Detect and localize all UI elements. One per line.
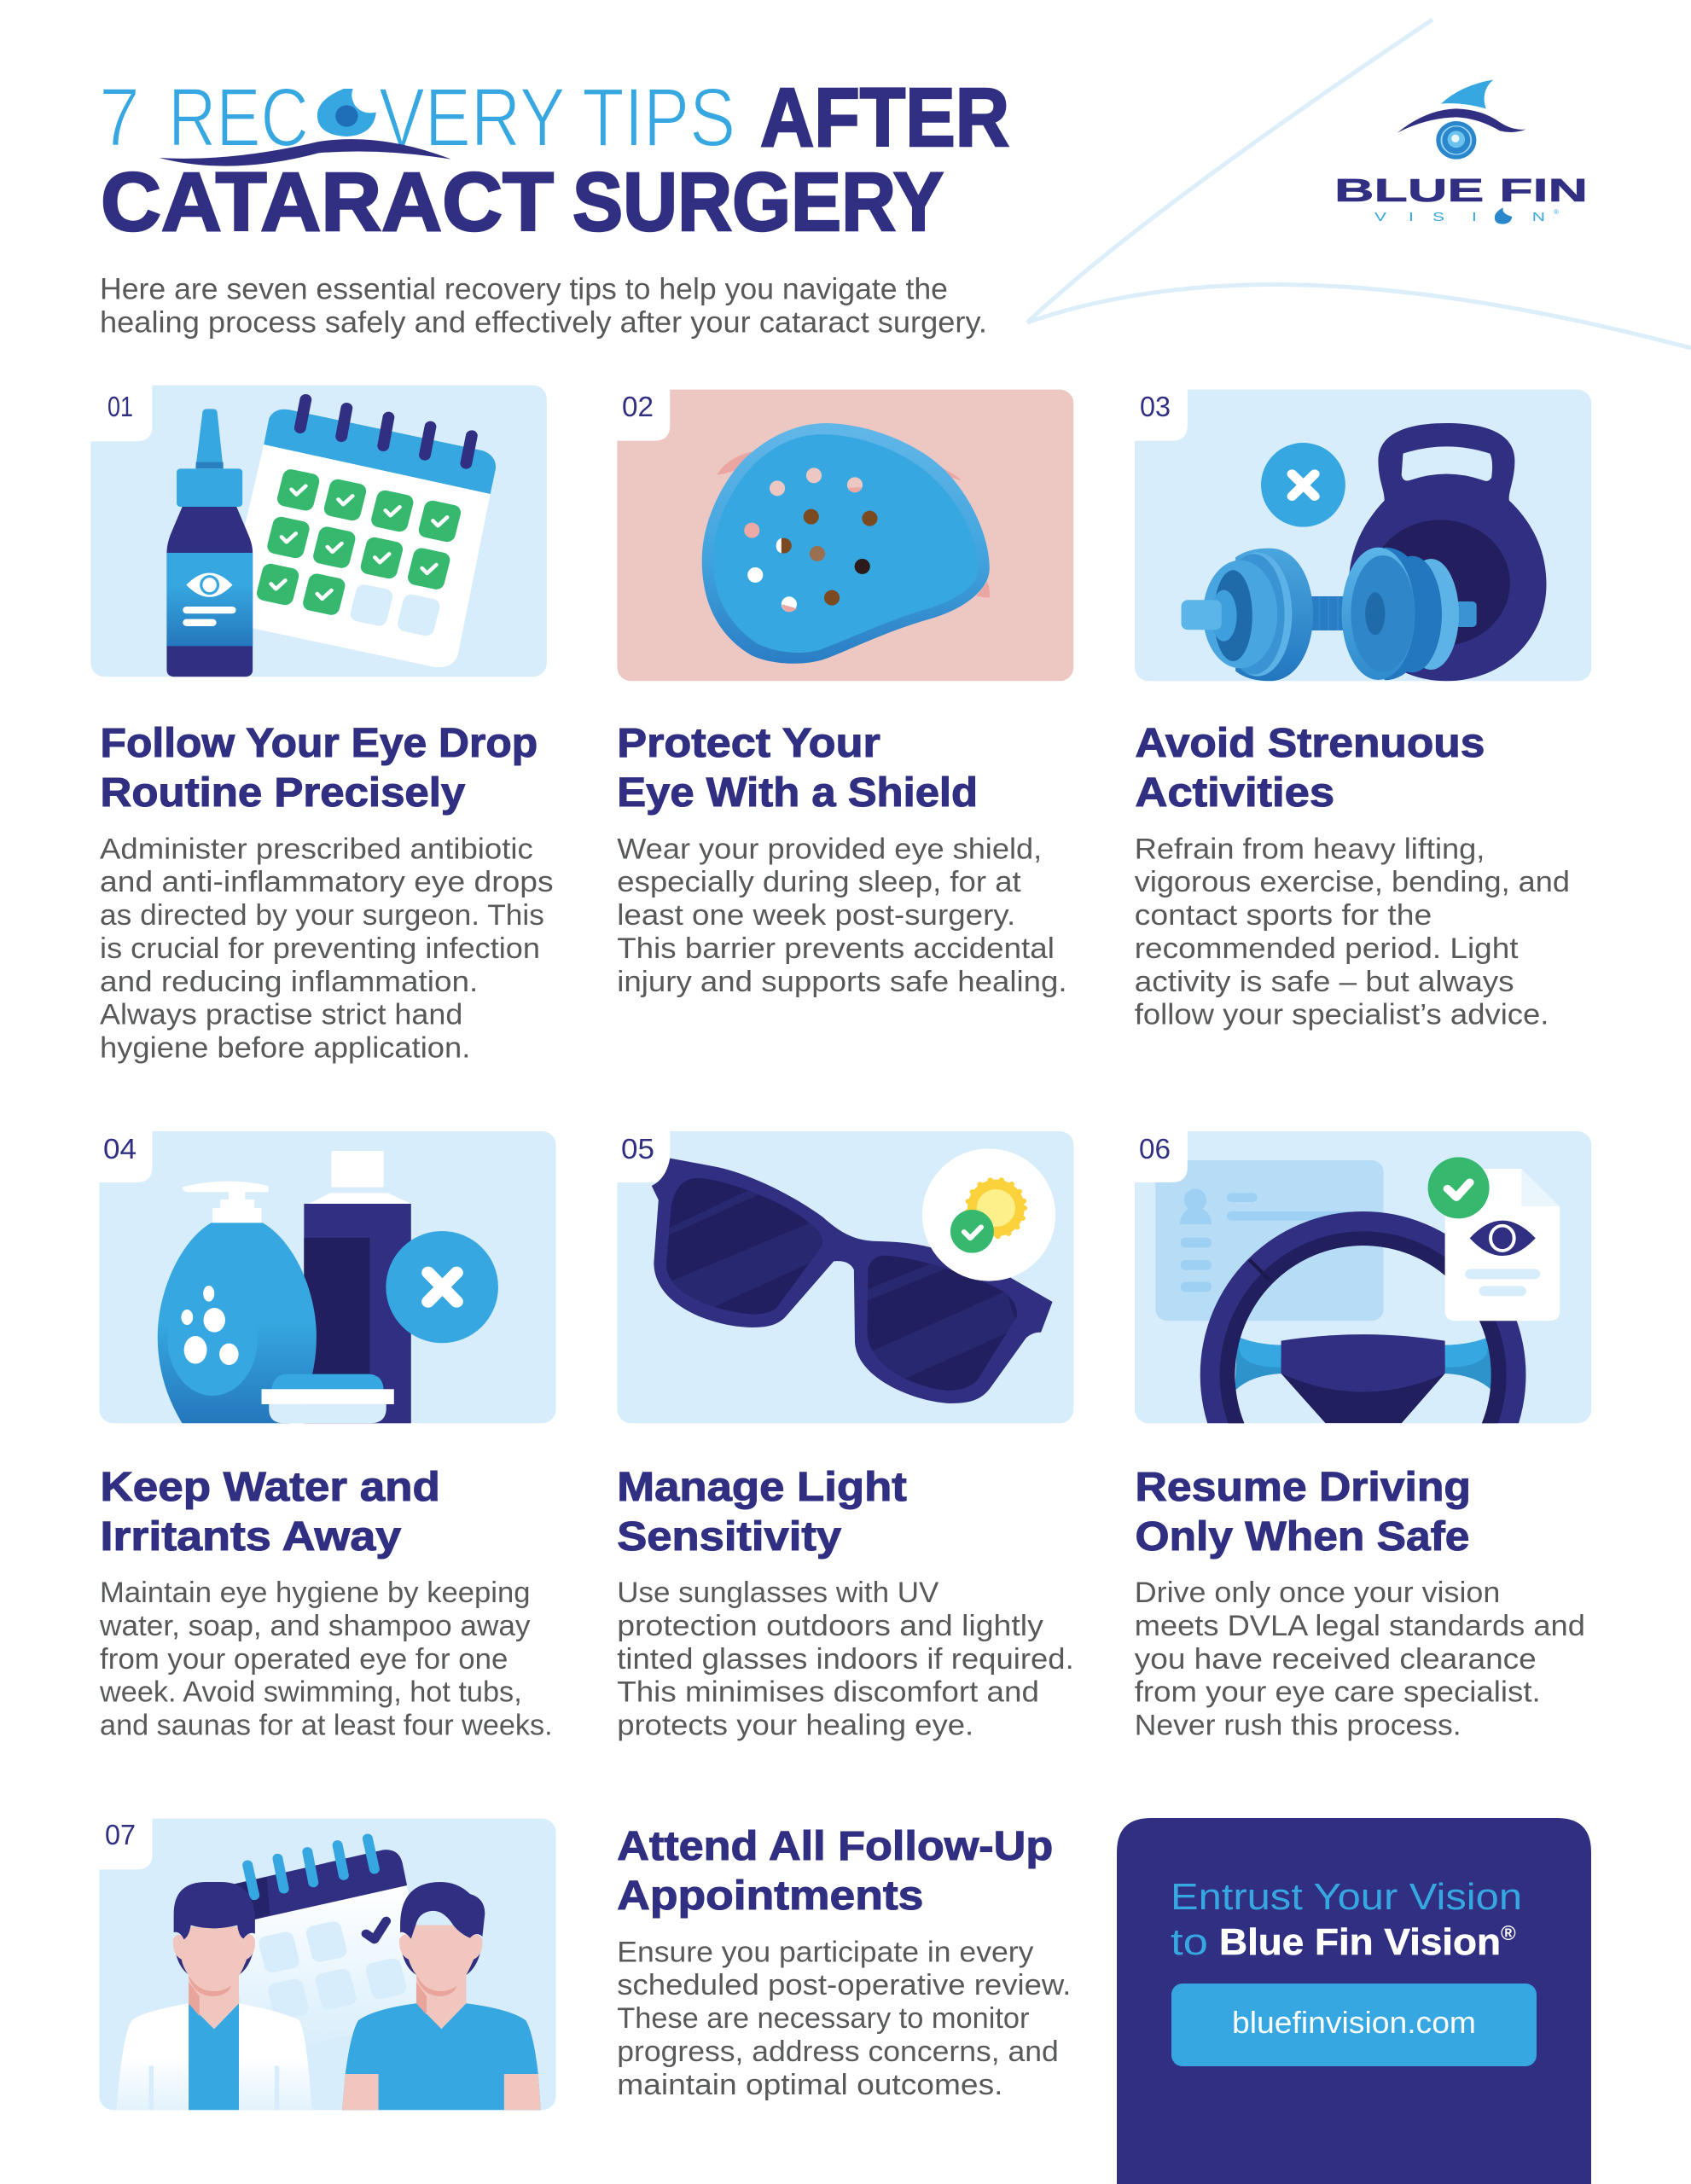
title: AFTER bbox=[760, 71, 1009, 164]
heading 5: Sensitivity bbox=[617, 1513, 841, 1560]
text block 7: Ensure you participate in every bbox=[617, 1936, 1034, 1968]
text block 1: Always practise strict hand bbox=[100, 999, 462, 1031]
title: SURGERY bbox=[572, 155, 944, 248]
text block 7 bbox=[617, 1936, 1071, 2101]
text block 7: maintain optimal outcomes. bbox=[617, 2069, 1002, 2101]
logo: Blue Fin Vision: ® bbox=[1554, 208, 1559, 216]
heading 3 bbox=[1136, 720, 1485, 816]
text block 3: follow your specialist’s advice. bbox=[1135, 999, 1549, 1031]
icon: calendar bbox=[241, 399, 496, 667]
text block 6: Never rush this process. bbox=[1135, 1710, 1461, 1742]
text block 2: This barrier prevents accidental bbox=[617, 932, 1055, 965]
text block 5: tinted glasses indoors if required. bbox=[617, 1643, 1074, 1676]
icon: kettlebell bbox=[1349, 423, 1546, 681]
text block 3: Refrain from heavy lifting, bbox=[1135, 833, 1485, 865]
intro text bbox=[100, 273, 987, 340]
text block 4: and saunas for at least four weeks. bbox=[100, 1710, 553, 1742]
number 02: 02 bbox=[622, 391, 654, 422]
panel 07: follow-up appointment bbox=[95, 1815, 556, 2110]
text block 6: from your eye care specialist. bbox=[1135, 1676, 1541, 1709]
text block 4: water, soap, and shampoo away bbox=[99, 1610, 531, 1642]
text block 2: Wear your provided eye shield, bbox=[617, 833, 1042, 865]
button: website: bluefinvision.com bbox=[1232, 2005, 1476, 2040]
panel 06: driving bbox=[1135, 1131, 1592, 1423]
heading 5: Manage Light bbox=[617, 1464, 907, 1510]
heading 2 bbox=[617, 720, 978, 816]
text block 5 bbox=[617, 1577, 1074, 1742]
text block 1: and reducing inflammation. bbox=[100, 966, 478, 998]
decorative sail curve bbox=[1027, 20, 1691, 348]
text block 1: is crucial for preventing infection bbox=[100, 932, 540, 965]
text block 6: meets DVLA legal standards and bbox=[1135, 1610, 1585, 1642]
intro text: healing process safely and effectively after your cataract surgery. bbox=[100, 305, 987, 340]
title: 7 bbox=[99, 71, 140, 164]
icon: sunglasses frame bbox=[652, 1159, 1053, 1403]
title: REC bbox=[168, 71, 309, 164]
text block 6: you have received clearance bbox=[1135, 1643, 1537, 1676]
heading 6: Only When Safe bbox=[1136, 1513, 1469, 1560]
icon: steering wheel bbox=[1200, 1211, 1525, 1423]
text block 2: especially during sleep, for at bbox=[617, 866, 1021, 898]
number 06: 06 bbox=[1139, 1133, 1171, 1165]
heading 6 bbox=[1136, 1464, 1471, 1560]
text block 1: and anti-inflammatory eye drops bbox=[100, 866, 554, 898]
text block 7: progress, address concerns, and bbox=[617, 2036, 1059, 2068]
text block 4: week. Avoid swimming, hot tubs, bbox=[99, 1676, 522, 1709]
heading 7 bbox=[617, 1823, 1053, 1919]
call to action heading: Blue Fin Vision bbox=[1219, 1921, 1501, 1963]
icon: cross badge bbox=[386, 1231, 498, 1343]
text block 3: activity is safe – but always bbox=[1135, 966, 1514, 998]
icon: eye test document bbox=[1428, 1157, 1560, 1321]
text block 4 bbox=[99, 1577, 553, 1742]
text block 7: These are necessary to monitor bbox=[617, 2002, 1029, 2035]
intro text: Here are seven essential recovery tips to help you navigate the bbox=[100, 273, 948, 305]
heading 4 bbox=[101, 1464, 440, 1560]
text block 3 bbox=[1135, 833, 1570, 1031]
icon: shampoo bottle bbox=[304, 1151, 411, 1423]
heading 5 bbox=[617, 1464, 907, 1560]
text block 1: Administer prescribed antibiotic bbox=[100, 833, 533, 865]
icon: dumbbell bbox=[1182, 548, 1477, 681]
text block 5: protects your healing eye. bbox=[617, 1710, 973, 1742]
text block 6: Drive only once your vision bbox=[1135, 1577, 1500, 1609]
icon: shield bbox=[702, 423, 990, 664]
icon: calendar bbox=[235, 1838, 427, 2056]
text block 5: Use sunglasses with UV bbox=[617, 1577, 938, 1609]
panel 05: sunglasses bbox=[613, 1127, 1073, 1423]
heading 1: Routine Precisely bbox=[101, 770, 466, 816]
number 04: 04 bbox=[103, 1133, 137, 1165]
title bbox=[99, 71, 1009, 248]
panel: call to action bbox=[1117, 1818, 1591, 2184]
heading 4: Keep Water and bbox=[101, 1464, 440, 1510]
call to action heading: to bbox=[1171, 1921, 1208, 1963]
logo: Blue Fin Vision: N bbox=[1532, 209, 1545, 224]
logo: Blue Fin Vision: VISI bbox=[1374, 209, 1477, 224]
icon: eye drop bottle bbox=[166, 409, 253, 677]
text block 7: scheduled post-operative review. bbox=[617, 1969, 1071, 2001]
title: CATARACT bbox=[101, 155, 554, 248]
text block 2: injury and supports safe healing. bbox=[617, 966, 1067, 998]
call to action heading bbox=[1171, 1876, 1522, 1963]
text block 1: as directed by your surgeon. This bbox=[100, 899, 544, 932]
title: VERY TIPS bbox=[379, 71, 735, 164]
text block 3: recommended period. Light bbox=[1135, 932, 1519, 965]
call to action heading: ® bbox=[1501, 1922, 1516, 1945]
text block 3: contact sports for the bbox=[1135, 899, 1432, 932]
heading 2: Protect Your bbox=[617, 720, 880, 766]
number 03: 03 bbox=[1140, 391, 1171, 422]
heading 1 bbox=[101, 720, 538, 816]
logo: Blue Fin Vision: BLUE FIN bbox=[1334, 173, 1588, 209]
number 05: 05 bbox=[621, 1133, 654, 1165]
text block 2 bbox=[617, 833, 1067, 998]
panel 02: eye shield bbox=[613, 386, 1073, 681]
heading 3: Avoid Strenuous bbox=[1136, 720, 1485, 766]
heading 7: Attend All Follow-Up bbox=[617, 1823, 1053, 1869]
heading 7: Appointments bbox=[617, 1873, 923, 1919]
icon: doctor bbox=[116, 1882, 311, 2110]
text block 4: from your operated eye for one bbox=[100, 1643, 508, 1676]
panel 04: soap and shampoo bbox=[95, 1127, 556, 1423]
text block 3: vigorous exercise, bending, and bbox=[1135, 866, 1570, 898]
heading 1: Follow Your Eye Drop bbox=[101, 720, 538, 766]
call to action heading: Entrust Your Vision bbox=[1171, 1876, 1522, 1918]
panel 01: eye drops and calendar bbox=[86, 381, 547, 677]
icon: patient bbox=[342, 1882, 541, 2110]
panel 03: weights bbox=[1130, 386, 1591, 681]
number 01: 01 bbox=[108, 391, 133, 422]
text block 1: hygiene before application. bbox=[100, 1031, 470, 1064]
button: website bbox=[1171, 1984, 1537, 2066]
text block 5: protection outdoors and lightly bbox=[617, 1610, 1044, 1642]
text block 4: Maintain eye hygiene by keeping bbox=[100, 1577, 531, 1609]
icon: soap dish bbox=[262, 1374, 394, 1423]
text block 6 bbox=[1135, 1577, 1585, 1742]
heading 3: Activities bbox=[1136, 770, 1334, 816]
icon: sun and check badge bbox=[922, 1148, 1055, 1281]
heading 2: Eye With a Shield bbox=[617, 770, 978, 816]
text block 5: This minimises discomfort and bbox=[617, 1676, 1039, 1709]
icon: cross badge bbox=[1261, 443, 1345, 527]
text block 1 bbox=[100, 833, 554, 1064]
text block 2: least one week post-surgery. bbox=[617, 899, 1015, 932]
logo: Blue Fin Vision bbox=[1334, 79, 1588, 224]
icon: pump bottle bbox=[158, 1182, 317, 1423]
heading 4: Irritants Away bbox=[101, 1513, 401, 1560]
heading 6: Resume Driving bbox=[1136, 1464, 1471, 1510]
icon: driving licence card bbox=[1155, 1160, 1384, 1321]
number 07: 07 bbox=[105, 1819, 136, 1850]
